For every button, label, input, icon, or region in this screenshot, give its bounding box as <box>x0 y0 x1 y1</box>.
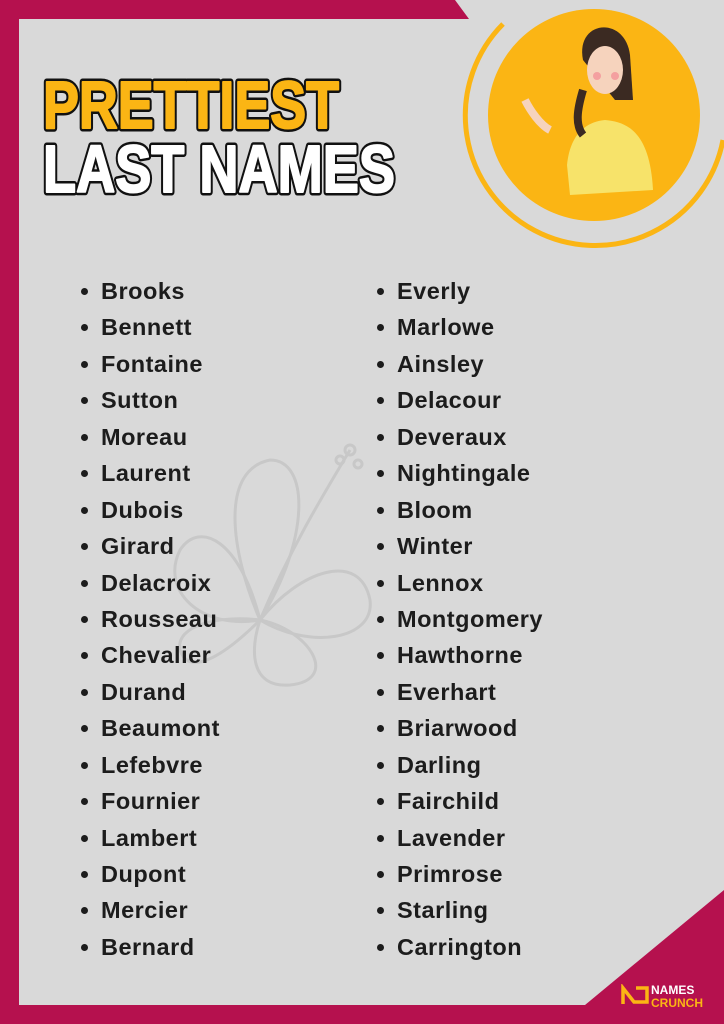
logo: names crunch: NAMES <box>651 983 694 997</box>
title: PRETTIEST <box>43 70 339 143</box>
names list: column 2: Montgomery <box>397 606 543 632</box>
watermark: hibiscus flower <box>174 444 372 686</box>
names list: column 2: Winter <box>397 533 473 559</box>
names list: column 1 <box>81 278 220 960</box>
names list: column 1: Mercier <box>101 897 188 923</box>
names list: column 1: Chevalier <box>101 642 211 668</box>
names list: column 1: Lambert <box>101 825 197 851</box>
names list: column 1: Delacroix <box>101 570 211 596</box>
names list: column 1: Lefebvre <box>101 752 203 778</box>
illustration: woman in yellow circle <box>462 9 724 248</box>
names list: column 2: Lavender <box>397 825 506 851</box>
names list: column 1: Durand <box>101 679 186 705</box>
names list: column 1: Sutton <box>101 387 178 413</box>
names list: column 2: Darling <box>397 752 481 778</box>
names list: column 2: Briarwood <box>397 715 518 741</box>
names list: column 2 <box>377 278 543 960</box>
names list: column 1: Moreau <box>101 424 188 450</box>
names list: column 1: Bennett <box>101 314 192 340</box>
names list: column 2: Lennox <box>397 570 484 596</box>
title: PRETTIEST <box>43 70 339 143</box>
names list: column 1: Rousseau <box>101 606 217 632</box>
names list: column 1: Laurent <box>101 460 191 486</box>
names list: column 2: Ainsley <box>397 351 484 377</box>
names list: column 1: Dubois <box>101 497 184 523</box>
names list: column 2: Carrington <box>397 934 522 960</box>
names list: column 2: Fairchild <box>397 788 499 814</box>
names list: column 1: Fournier <box>101 788 200 814</box>
names list: column 1: Dupont <box>101 861 186 887</box>
names list: column 2: Hawthorne <box>397 642 523 668</box>
names list: column 1: Fontaine <box>101 351 203 377</box>
names list: column 2: Bloom <box>397 497 473 523</box>
names list: column 2: Delacour <box>397 387 502 413</box>
names list: column 2: Primrose <box>397 861 503 887</box>
names list: column 1: Girard <box>101 533 175 559</box>
names list: column 2: Everly <box>397 278 471 304</box>
names list: column 2: Marlowe <box>397 314 495 340</box>
names list: column 2: Starling <box>397 897 488 923</box>
names list: column 1: Brooks <box>101 278 185 304</box>
names list: column 2: Nightingale <box>397 460 530 486</box>
names list: column 1: Beaumont <box>101 715 220 741</box>
logo: names crunch: CRUNCH <box>651 996 703 1010</box>
title <box>43 70 396 205</box>
names list: column 1: Bernard <box>101 934 195 960</box>
logo: names crunch <box>621 983 703 1010</box>
names list: column 2: Everhart <box>397 679 496 705</box>
names list: column 2: Deveraux <box>397 424 507 450</box>
